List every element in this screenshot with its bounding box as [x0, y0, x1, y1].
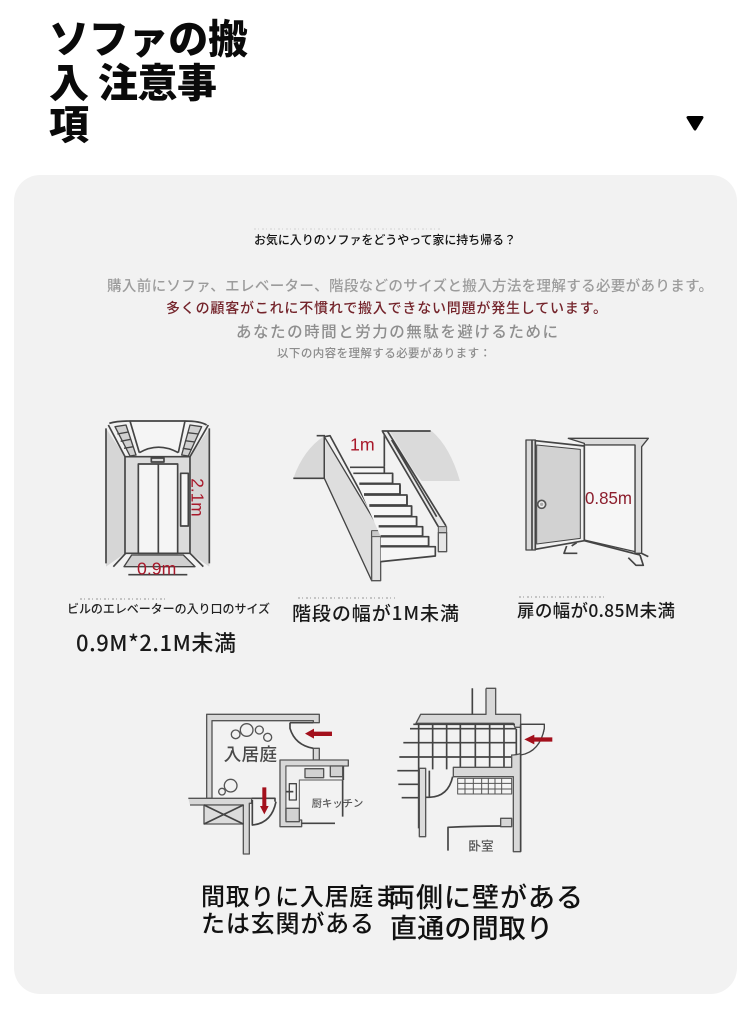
title: 注意事 [98, 51, 217, 109]
caption: straight plan: 直通の間取り [390, 907, 553, 946]
elevator limit: 0.9M*2.1M未満 [76, 626, 236, 658]
title: 項 [49, 93, 89, 151]
intro noise [254, 228, 440, 230]
label: 1m: 1m [350, 435, 375, 455]
intro line: need to understand: 購入前にソファ、エレベーター、階段などのサイズと搬入方法を理解する必要があります。 [107, 275, 713, 296]
stairs noise [298, 597, 395, 599]
caption: straight plan [388, 876, 583, 946]
arrow: entrance [524, 735, 552, 744]
label: 0.9m: 0.9m [137, 559, 176, 579]
intro question: お気に入りのソファをどうやって家に持ち帰る？ [254, 231, 516, 248]
title [49, 7, 248, 151]
label: 入居庭: 入居庭 [224, 741, 277, 766]
elevator noise [80, 598, 168, 600]
door caption: 扉の幅が0.85M未満 [517, 598, 675, 623]
stairs caption: 階段の幅が1M未満 [292, 599, 459, 626]
title: 入 [49, 51, 89, 109]
label: kitchen: 厨キッチン [312, 795, 363, 810]
door noise [519, 596, 605, 598]
icon: door [526, 438, 648, 565]
intro line: red warning: 多くの顧客がこれに不慣れで搬入できない問題が発生しています。 [166, 298, 607, 318]
caption: entry court plan: たは玄関がある [201, 904, 374, 939]
icon: elevator [106, 421, 209, 579]
icon: stairs [293, 431, 460, 581]
icon: dropdown triangle [688, 118, 702, 129]
arrow: entrance right [305, 729, 332, 739]
caption: entry court plan [201, 877, 398, 939]
intro line: below: 以下の内容を理解する必要があります： [277, 345, 491, 361]
label: 0.85m: 0.85m [585, 488, 632, 508]
intro text block [107, 229, 713, 361]
title: ソファの搬 [49, 7, 248, 65]
icon: floor plan with entry court [188, 714, 363, 854]
panel: main card [14, 175, 737, 994]
caption: entry court plan: 間取りに入居庭ま [201, 877, 398, 912]
label: 2.1m: 2.1m [188, 478, 208, 517]
arrow: entrance down [260, 787, 269, 814]
label: 卧室: 卧室 [468, 835, 494, 854]
icon: straight-through floor plan [397, 688, 552, 854]
caption: straight plan: 両側に壁がある [388, 876, 583, 915]
intro line: avoid waste: あなたの時間と労力の無駄を避けるために [236, 320, 558, 342]
elevator caption: ビルのエレベーターの入り口のサイズ [67, 600, 270, 617]
